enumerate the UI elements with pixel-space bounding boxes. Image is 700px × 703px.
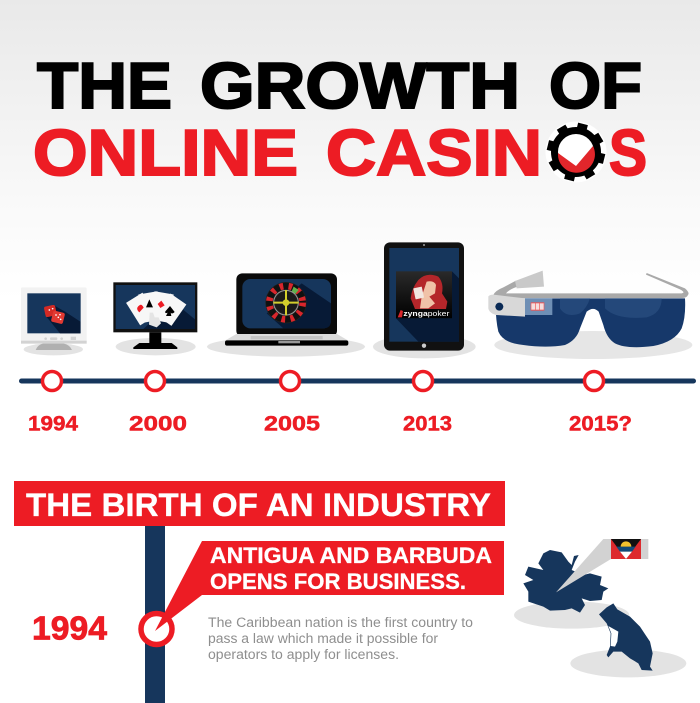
timeline marker 2000 <box>146 372 164 390</box>
callout <box>155 541 504 631</box>
vertical timeline <box>145 520 165 703</box>
title line 2: S <box>609 116 647 189</box>
map: Antigua and Barbuda <box>514 539 686 677</box>
timeline years: 2013 <box>403 412 452 436</box>
icon: gear with check mark <box>541 117 611 187</box>
timeline years: 1994 <box>28 412 78 436</box>
timeline years: 2005 <box>264 412 320 436</box>
section banner: THE BIRTH OF AN INDUSTRY <box>26 487 491 523</box>
title line 2: CASIN <box>326 116 542 189</box>
title line 2 <box>33 116 647 189</box>
title line 1: OF <box>549 49 642 122</box>
flag callout <box>556 539 648 592</box>
title line 1 <box>37 49 642 122</box>
timeline marker 2005 <box>280 372 300 390</box>
illustration: CRT monitor with dice <box>21 287 87 355</box>
illustration: smart glasses <box>488 271 692 359</box>
callout: ANTIGUA AND BARBUDA <box>210 543 492 568</box>
timeline marker 2013 <box>414 372 432 390</box>
timeline marker 2015 <box>584 372 604 390</box>
title line 1: GROWTH <box>200 49 520 122</box>
title <box>33 49 647 189</box>
illustration: laptop with roulette wheel <box>207 273 365 357</box>
illustration: flat monitor with cards <box>113 282 197 355</box>
callout: OPENS FOR BUSINESS. <box>210 569 466 594</box>
body text: pass a law which made it possible for <box>208 631 439 646</box>
body text <box>208 615 473 662</box>
timeline years: 2015? <box>569 412 632 436</box>
map: Barbuda lagoon <box>608 626 618 647</box>
title line 1: THE <box>37 49 172 122</box>
map: Antigua <box>523 550 608 613</box>
map: Barbuda <box>599 603 653 671</box>
marker 1994 ring <box>141 614 172 644</box>
timeline years <box>28 412 632 436</box>
marker 1994 fill <box>141 614 172 644</box>
title line 2: ONLINE <box>33 116 298 189</box>
timeline years: 2000 <box>129 412 187 436</box>
illustration: tablet with poker app <box>373 242 476 358</box>
year 1994: 1994 <box>32 610 108 646</box>
body text: operators to apply for licenses. <box>208 647 399 662</box>
body text: The Caribbean nation is the first country to <box>208 615 473 630</box>
timeline marker 1994 <box>42 372 62 390</box>
poker logo: zyngapoker <box>403 309 450 318</box>
timeline <box>22 372 694 390</box>
